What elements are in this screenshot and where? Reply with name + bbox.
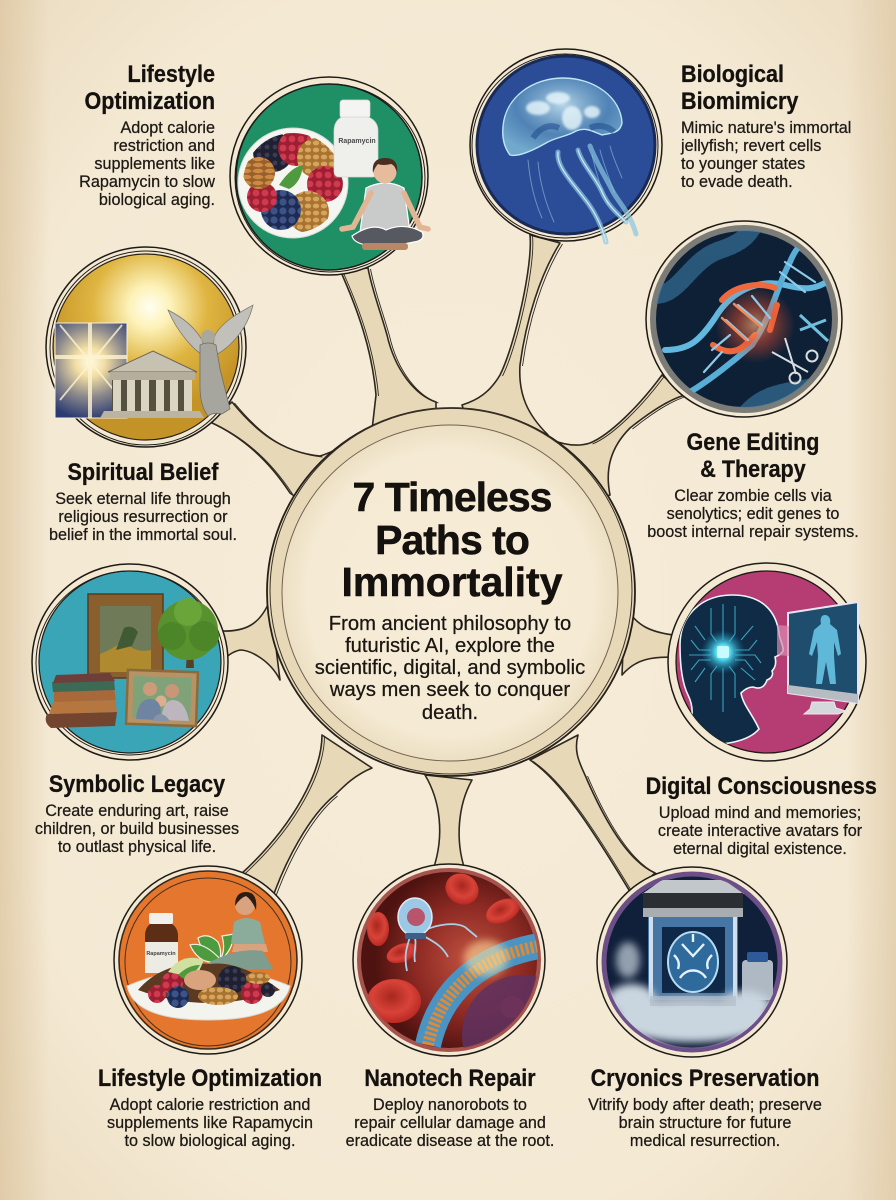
text: spiritual belief: Seek eternal life through: [55, 490, 231, 508]
text: symbolic legacy: Create enduring art, raise: [45, 802, 229, 820]
text: gene editing: [647, 429, 859, 541]
circuit head: [680, 595, 783, 744]
text: biological biomimicry: to evade death.: [681, 173, 793, 191]
text: lifestyle optimization top: restriction and: [113, 137, 215, 155]
text: cryonics preservation: Vitrify body after death; preserve: [588, 1096, 822, 1114]
meditating woman: [342, 158, 428, 250]
supplement bottle: Rapamycin: [338, 138, 376, 145]
jellyfish body: [503, 78, 636, 242]
text: digital consciousness: eternal digital existence.: [673, 840, 847, 858]
text: lifestyle optimization bottom: [98, 1065, 322, 1150]
icon: lifestyle circle orange: [114, 866, 302, 1054]
subtitle: futuristic AI, explore the: [345, 635, 555, 657]
title: [342, 474, 563, 605]
monitor: [777, 602, 858, 714]
leaves: [190, 934, 234, 962]
text: biological biomimicry: [680, 61, 851, 191]
text: lifestyle optimization top: biological aging.: [99, 191, 215, 209]
icon: jellyfish circle: [470, 49, 662, 242]
icon: digital consciousness circle: [668, 563, 866, 761]
text: gene editing: & Therapy: [700, 456, 806, 483]
text: cryonics preservation: brain structure for future: [619, 1114, 791, 1132]
temple: [100, 351, 204, 418]
text: biological biomimicry: Mimic nature's immortal: [681, 119, 851, 137]
supplement bottle: [334, 100, 378, 177]
text: lifestyle optimization top: Optimization: [84, 88, 215, 115]
text: nanotech repair: Nanotech Repair: [364, 1065, 536, 1092]
sunburst square: [55, 320, 127, 420]
subtitle: ways men seek to conquer: [330, 679, 570, 701]
text: lifestyle optimization top: supplements like: [94, 155, 215, 173]
text: symbolic legacy: [35, 771, 239, 856]
text: symbolic legacy: children, or build businesses: [35, 820, 239, 838]
text: spiritual belief: belief in the immortal soul.: [49, 526, 237, 544]
text: spiritual belief: Spiritual Belief: [68, 459, 218, 486]
icon: legacy circle teal: [32, 564, 228, 760]
text: cryonics preservation: Cryonics Preservation: [591, 1065, 819, 1092]
text: gene editing: Clear zombie cells via: [674, 487, 832, 505]
title: 7 Timeless: [353, 474, 551, 520]
text: digital consciousness: [646, 773, 877, 858]
text: lifestyle optimization top: Lifestyle: [128, 61, 215, 88]
bowl of food: [127, 958, 290, 1020]
text: symbolic legacy: Symbolic Legacy: [49, 771, 225, 798]
text: gene editing: boost internal repair systems.: [647, 523, 859, 541]
text: spiritual belief: [49, 459, 237, 544]
text: lifestyle optimization bottom: Lifestyle Optimization: [98, 1065, 322, 1092]
plate of food: [238, 128, 348, 238]
connector branches: [210, 235, 688, 906]
subtitle: scientific, digital, and symbolic: [315, 657, 585, 679]
icon: cryonics circle: [597, 867, 787, 1057]
central circle: [267, 408, 635, 776]
family photo: [126, 670, 198, 726]
text: biological biomimicry: Biological: [681, 61, 784, 88]
supplement bottle: [145, 913, 178, 973]
text: nanotech repair: repair cellular damage and: [354, 1114, 546, 1132]
icon: DNA circle: [646, 215, 842, 417]
text: lifestyle optimization bottom: supplements like Rapamycin: [107, 1114, 313, 1132]
title: Immortality: [342, 559, 562, 605]
text: cryonics preservation: [588, 1065, 822, 1150]
subtitle: [315, 612, 585, 724]
text: digital consciousness: Digital Consciousness: [646, 773, 877, 800]
angel statue: [168, 305, 253, 416]
text: lifestyle optimization top: [79, 61, 216, 209]
framed painting: [88, 594, 163, 678]
icon: nanotech circle: [352, 863, 546, 1057]
text: digital consciousness: create interactive avatars for: [658, 822, 862, 840]
icon: lifestyle circle green: [230, 77, 428, 275]
text: digital consciousness: Upload mind and memories;: [659, 804, 861, 822]
icon: spiritual circle yellow: [46, 247, 253, 447]
tree: [158, 598, 219, 668]
text: nanotech repair: eradicate disease at the root.: [346, 1132, 554, 1150]
central title block: [315, 474, 585, 724]
text: lifestyle optimization bottom: Adopt calorie restriction and: [110, 1096, 310, 1114]
nanorobot: [398, 898, 477, 971]
text: nanotech repair: Deploy nanorobots to: [373, 1096, 527, 1114]
subtitle: From ancient philosophy to: [329, 612, 571, 634]
text: biological biomimicry: Biomimicry: [681, 88, 798, 115]
title: Paths to: [375, 516, 529, 562]
subtitle: death.: [422, 702, 478, 724]
text: gene editing: Gene Editing: [687, 429, 819, 456]
text: lifestyle optimization top: Rapamycin to slow: [79, 173, 215, 191]
supplement bottle: Rapamycin: [146, 951, 176, 957]
text: lifestyle optimization top: Adopt calorie: [120, 119, 215, 137]
text: biological biomimicry: to younger states: [681, 155, 805, 173]
text: gene editing: senolytics; edit genes to: [667, 505, 839, 523]
text: cryonics preservation: medical resurrection.: [630, 1132, 780, 1150]
text: symbolic legacy: to outlast physical life.: [58, 838, 216, 856]
text: biological biomimicry: jellyfish; revert cells: [681, 137, 821, 155]
text: lifestyle optimization bottom: to slow biological aging.: [124, 1132, 295, 1150]
woman: [205, 892, 273, 969]
text: nanotech repair: [346, 1065, 554, 1150]
text: spiritual belief: religious resurrection or: [58, 508, 228, 526]
stacked books: [46, 673, 117, 728]
